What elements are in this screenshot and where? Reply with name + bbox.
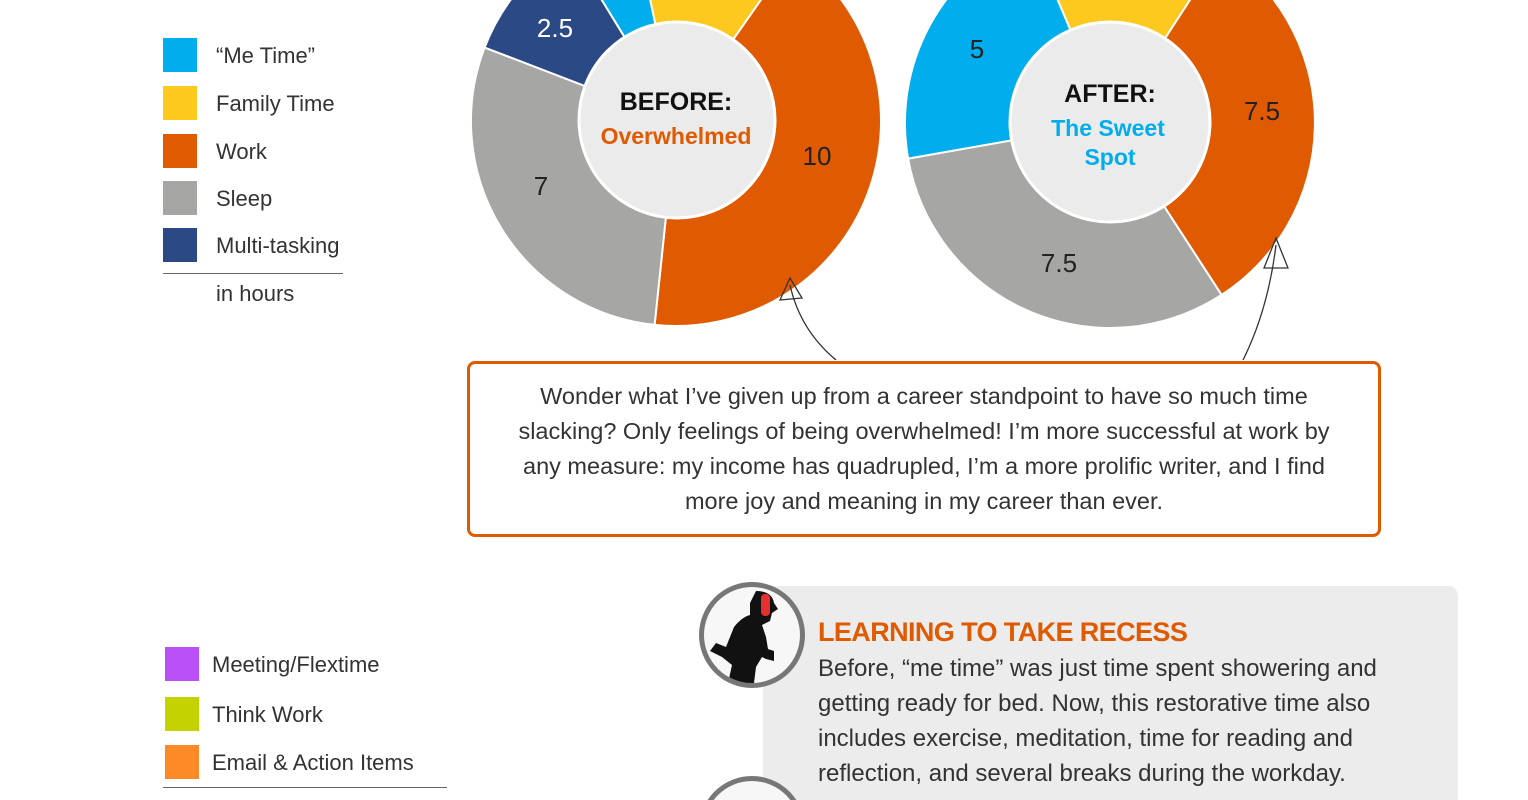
legend: top [163,38,343,306]
callout [467,361,1381,537]
chart: before: 7 [534,171,548,201]
heading: LEARNING TO TAKE RECESS [818,617,1187,647]
chart: after: 7.5 [1041,248,1077,278]
chart: after: 5 [970,34,984,64]
chart: after: AFTER: [1064,80,1156,108]
arrow: to before work [780,278,836,360]
legend unit note: in hours [216,281,294,306]
chart: before [471,0,881,326]
legend: top: “Me Time” [216,43,315,68]
chart: after [905,0,1315,328]
chart: after: The Sweet [1051,115,1165,141]
callout: more joy and meaning in my career than ever. [685,488,1163,514]
panel: recess [763,586,1458,800]
legend: top: Sleep [216,186,272,211]
legend item: think work [165,697,323,731]
arrow: to after work [1243,238,1288,360]
legend item: me time [163,38,315,72]
icon: runner [699,582,805,688]
legend item: family time [163,86,335,120]
chart: before: 2.5 [537,13,573,43]
legend: top: Multi-tasking [216,233,339,258]
chart: before: 10 [803,141,831,171]
legend: bottom: Email & Action Items [212,750,414,775]
text block: Before, “me time” was just time spent showering and getting ready for bed. Now, this restorative time also includes exercise, meditation, time for reading and reflection, and several breaks during the workday. [818,655,1377,787]
callout: slacking? Only feelings of being overwhelmed! I’m more successful at work by [518,418,1330,444]
callout: any measure: my income has quadrupled, I’m a more prolific writer, and I find [523,453,1325,479]
legend: top: Family Time [216,91,335,116]
legend: bottom: Think Work [212,702,323,727]
legend item: work [163,134,267,168]
callout: Wonder what I’ve given up from a career standpoint to have so much time [540,383,1308,409]
chart: after: 7.5 [1244,96,1280,126]
chart: before: Overwhelmed [601,123,751,149]
legend: bottom [163,647,447,788]
legend: top: Work [216,139,267,164]
legend item: sleep [163,181,272,215]
legend item: multi-tasking [163,228,339,262]
donut charts [472,0,1314,360]
legend item: email [165,745,414,779]
chart: before: BEFORE: [620,88,732,116]
chart: after: Spot [1084,144,1136,170]
legend: bottom: Meeting/Flextime [212,652,380,677]
legend item: meeting/flextime [165,647,380,681]
icon: second (partial) [708,776,796,800]
